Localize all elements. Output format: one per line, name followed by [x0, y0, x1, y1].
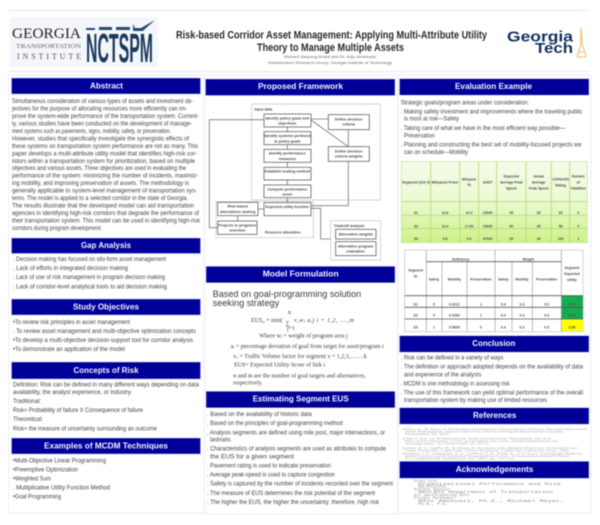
- text block: conclusion: . Risk can be defined in a variety of ways: [401, 355, 503, 362]
- heading: Model Formulation: Model Formulation: [263, 268, 339, 278]
- table: segment data: To: [467, 183, 471, 187]
- text block: concepts of risk: Risk= Probability of failure X Consequence of failure: [13, 407, 144, 414]
- text block: MCDM techniques: [13, 457, 110, 501]
- table: segment data: S3: [414, 237, 418, 241]
- table: segment data: 56: [559, 224, 563, 228]
- table: segment data: Number: [572, 174, 586, 178]
- heading: Gap Analysis: Gap Analysis: [81, 240, 131, 250]
- text block: abstract: ly, various studies have been conducted on the development of manage-: [12, 120, 192, 127]
- text block: abstract: corridors during program development.: [12, 225, 102, 232]
- text block: MCDM techniques: •Preemptive Optimization: [13, 466, 78, 473]
- text block: strategic goals: . Planning and constructing the best set of mobility-focused projects we: [401, 142, 582, 149]
- text block: estimating segment EUS: . Based on the principles of goal-programming method: [207, 420, 343, 427]
- text block: estimating segment EUS: . Characteristics of analysis segments are used as attributes to compute: [207, 446, 387, 453]
- heading: Estimating Segment EUS: [206, 391, 395, 408]
- text block: strategic goals: Strategic goals/program areas under consideration:: [401, 99, 529, 106]
- text block: gap analysis: [13, 256, 167, 290]
- flowchart: proposed framework: Input data: [254, 107, 273, 111]
- title: Theory to Manage Multiple Assets: [257, 42, 404, 54]
- text block: estimating segment EUS: . The measure of EUS determines the risk potential of the segment: [207, 490, 375, 497]
- text block: strategic goals: is most at risk—Safety: [404, 116, 460, 123]
- text block: goal-programming strategy: [213, 289, 361, 308]
- table: segment data: 0: [577, 211, 579, 215]
- table: segment data: 45: [509, 211, 513, 215]
- text block: estimating segment EUS: . Based on the availability of historic data: [207, 411, 312, 418]
- table: segment expected utility: 0.1000: [449, 314, 460, 318]
- text block: conclusion: . The use of this framework can yield optimal performance of the overall: [401, 389, 583, 396]
- text block: abstract: paper develops a multi-attribute utility model that identifies high-risk cor-: [12, 150, 197, 157]
- flowchart: proposed framework: Define decision: [335, 117, 363, 121]
- text block: acknowledgements: Project Personnel:: [414, 496, 456, 501]
- text block: conclusion: . MCDM is one methodology in assessing risk: [401, 380, 511, 387]
- text block: formula definitions: vₓ = Traffic Volume factor for segment x = 1,2,3,…….k: [233, 353, 367, 360]
- text block: estimating segment EUS: . Average peak-speed is used to capture congestion: [207, 472, 335, 479]
- text block: study objectives: •To demonstrate an application of the model: [13, 346, 125, 353]
- table: segment data: 55: [509, 237, 513, 241]
- text block: acknowledgements: Project Title:: [414, 479, 438, 484]
- text block: acknowledgements: Georgia Department of Transportation: [418, 490, 553, 495]
- text block: abstract: their transportation system. This model can be used in identifying high-risk: [12, 218, 201, 224]
- text block: abstract: ing mobility, and improving preservation of assets. The methodology is: [12, 180, 189, 187]
- table: segment data: COPACES: [552, 177, 570, 181]
- table: segment expected utility: Mobility: [448, 277, 461, 281]
- text block: gap analysis: . Decision making has focused on silo-form asset management: [13, 256, 166, 263]
- table: segment data: 15000: [483, 211, 493, 215]
- table: segment expected utility: Safety: [498, 277, 509, 281]
- table: segment data: 1: [577, 237, 579, 241]
- text block: estimating segment EUS: [207, 411, 393, 506]
- table: segment expected utility: 0: [433, 314, 435, 318]
- text block: concepts of risk: Theoretical:: [13, 416, 43, 423]
- table: segment expected utility: Deficiency: [452, 258, 469, 262]
- text block: concepts of risk: Traditional:: [13, 398, 41, 405]
- flowchart: proposed framework: measures: [279, 157, 296, 161]
- text block: estimating segment EUS: . Analysis segments are defined using mile post, major intersections, or: [207, 429, 385, 436]
- text block: study objectives: [13, 319, 196, 353]
- text block: MCDM techniques: •Multi-Objective Linear Programming: [13, 457, 106, 464]
- text block: goal-programming strategy: seeking strategy: [213, 298, 280, 308]
- formula: EUS: = min(: [265, 317, 282, 324]
- heading: Concepts of Risk: Concepts of Risk: [74, 365, 139, 375]
- formula: EUS: EUS: [251, 318, 262, 324]
- table: segment data: Segment (GA 3): [402, 181, 430, 185]
- text block: references: strategy.aspx. Accessed Jan. 10, 2012.: [405, 442, 490, 446]
- formula: EUS: ai: [262, 320, 265, 324]
- table: segment data: Peak Speed: [529, 186, 548, 190]
- text block: estimating segment EUS: the EUS for a given segment: [210, 453, 294, 460]
- table: segment data: 15000: [483, 224, 493, 228]
- text block: references: Asset Management. Detroit University, Detroit Intelligent Infrastructure Systems,: [405, 430, 565, 434]
- flowchart: proposed framework: evaluation: [346, 250, 366, 254]
- text block: abstract: tems. The model is applied to a selected corridor in the state of Georgia.: [12, 195, 188, 202]
- text block: estimating segment EUS: . The higher the EUS, the higher the uncertainty; therefore, high risk: [207, 499, 380, 506]
- heading: Acknowledgements: Acknowledgements: [456, 464, 534, 474]
- table: segment data: Milepost: [462, 177, 477, 181]
- table: segment expected utility: 0: [433, 302, 435, 306]
- flowchart: proposed framework: Resource allocation: [265, 231, 301, 235]
- logo: Georgia Tech: Tech: [535, 41, 573, 57]
- text block: strategic goals: . Making safety investment and improvements where the traveling public: [401, 108, 582, 115]
- table: segment data: Actual: [533, 174, 544, 178]
- text block: references: Philadelphia, PA, 2007.: [405, 432, 450, 437]
- table: segment data: of: [577, 180, 581, 184]
- table: segment data: Fatalities: [571, 186, 586, 190]
- text block: abstract: prove the system-wide performance of the transportation system. Current-: [12, 113, 199, 120]
- title: Infrastructure Research Group, Georgia Institute of Technology: [268, 61, 392, 65]
- table: segment expected utility: 0.37: [569, 302, 575, 306]
- table: segment expected utility: Utility: [567, 278, 577, 282]
- table: segment expected utility: 0.3: [520, 325, 524, 329]
- table: segment data: Expected: [504, 174, 519, 178]
- heading: Study Objectives: Study Objectives: [73, 302, 139, 312]
- title: Risk-based Corridor Asset Management: Applying Multi-Attribute Utility: [176, 30, 487, 42]
- heading: Proposed Framework: [206, 79, 395, 96]
- flowchart: proposed framework: Expected utility function: [266, 205, 310, 209]
- flowchart: proposed framework: Compute performance: [267, 187, 307, 191]
- text block: formula definitions: [231, 333, 384, 386]
- text block: study objectives: •To develop a multi-objective decision-support tool for corridor analysis: [13, 337, 193, 344]
- heading: Conclusion: Conclusion: [472, 338, 515, 348]
- flowchart: proposed framework: alternatives ranking: [220, 210, 256, 214]
- flowchart: proposed framework: Alternative program: [338, 244, 374, 248]
- text block: strategic goals: can on schedule—Mobility: [404, 149, 469, 156]
- text block: estimating segment EUS: landmarks: [210, 437, 231, 444]
- text block: formula definitions: EUS= Expected Utility Score of link i: [234, 362, 325, 368]
- text block: references: Keeney, R. L., Raiffa, H., & Meyer, R. Decisions with Multiple Objectives: Preferences and: [402, 446, 578, 451]
- table: segment data: 35: [537, 224, 541, 228]
- text block: references: Value Trade-offs. Cambridge, United Kingdom: Cambridge University Press, 1993.: [405, 448, 570, 454]
- text block: abstract: jectives for the purpose of allocating resources more efficiently can im-: [11, 106, 187, 112]
- text block: formula definitions: n and m are the number of goal targets and alternatives,: [233, 372, 366, 379]
- table: segment expected utility: Mobility: [515, 277, 529, 281]
- text block: gap analysis: . Lack of corridor-level analytical tools to aid decision making: [13, 283, 167, 290]
- table: segment expected utility: 1: [433, 325, 435, 329]
- text block: acknowledgements: Project Sponsor:: [414, 487, 452, 492]
- flowchart: proposed framework: Identify policy goals and: [265, 116, 310, 120]
- panel: right column: [398, 75, 591, 513]
- flowchart: proposed framework: criteria: [342, 123, 356, 127]
- heading: References: References: [473, 410, 517, 420]
- table: segment expected utility: 0.3: [520, 302, 524, 306]
- text block: strategic goals: Preservation: [404, 132, 435, 140]
- heading: Conclusion: [400, 336, 589, 352]
- formula: EUS: j=1: [286, 326, 295, 332]
- table: segment data: Rating: [555, 183, 566, 187]
- text block: formula definitions: Where wⱼ = weight of program area j: [259, 333, 348, 340]
- header: logo Georgia Transportation Institute and NCTSPM: INSTITUTE: [17, 52, 81, 61]
- table: segment expected utility: S2: [414, 314, 418, 318]
- header: logo Georgia Transportation Institute and NCTSPM: GEORGIA: [12, 26, 81, 42]
- text block: references: for Competitively. Washington, DC, 2007, pp. 133-142.: [405, 456, 515, 462]
- table: segment data: S2: [414, 224, 418, 228]
- table: segment data: 14.4: [466, 211, 472, 215]
- table: segment expected utility: 0.3: [520, 314, 524, 318]
- table: segment data: 0.8: [443, 237, 447, 241]
- flowchart: proposed framework: [209, 104, 381, 260]
- heading: Evaluation Example: [400, 79, 589, 95]
- heading: Examples of MCDM Techniques: [12, 438, 200, 454]
- table: segment expected utility: 0.4: [501, 314, 506, 318]
- text block: acknowledgements: Adjo Amekudzi, Ph.D., Michael Meyer,: [418, 499, 564, 504]
- heading: Proposed Framework: Proposed Framework: [258, 81, 343, 91]
- table: segment data: AADT: [483, 181, 493, 185]
- text block: abstract: ridors within a transportation system for prioritization, based on multiple: [12, 158, 196, 165]
- table: segment expected utility: 1: [480, 302, 482, 306]
- text block: references: Multi-Criteria Capital Investment Programming Process. Transportation Research Board.: [405, 454, 570, 458]
- table: segment data: 47000: [483, 237, 493, 241]
- table: segment data: Milepost From: [432, 181, 458, 185]
- panel: middle column: [204, 75, 398, 514]
- table: segment expected utility: Segment: [565, 266, 580, 270]
- table: segment data: 14.4: [442, 224, 448, 228]
- heading: Concepts of Risk: [12, 362, 200, 379]
- text block: concepts of risk: availability, the analyst experience, or industry.: [13, 389, 132, 396]
- title: [176, 30, 487, 65]
- heading: Model Formulation: [206, 266, 395, 283]
- text block: abstract: [11, 98, 201, 232]
- table: segment data: 63: [559, 211, 563, 215]
- text block: acknowledgements: Decisions: [418, 485, 446, 490]
- table: segment expected utility: 0.4: [501, 325, 506, 329]
- table: segment expected utility: S3: [414, 325, 418, 329]
- table: segment expected utility: 0.2212: [449, 302, 460, 306]
- text block: references: The City of Edmonton Infrastructure Strategy (n.d.).: [402, 436, 552, 440]
- table: segment expected utility: 0: [480, 325, 482, 329]
- text block: goal-programming strategy: Based on goal-programming solution: [213, 289, 361, 299]
- formula: EUS: vₓwⱼ aᵢ) i = 1,2, ….,m: [294, 317, 355, 324]
- table: segment expected utility: 0.3: [544, 302, 549, 306]
- flowchart: proposed framework: objectives: [278, 122, 296, 126]
- text block: acknowledgements: Organizational Performance and Risk: [418, 482, 561, 487]
- text block: abstract: generally applicable to system-level management of transportation sys-: [12, 188, 197, 195]
- text block: concepts of risk: Risk= the measure of uncertainty surrounding an outcome: [13, 426, 158, 432]
- table: segment data: Average Peak: [500, 180, 523, 184]
- text: NCTSPM: [86, 25, 153, 71]
- text block: MCDM techniques: •Weighted Sum: [13, 475, 51, 482]
- text block: conclusion: and experience of the analysts: [404, 371, 481, 378]
- text block: abstract: The results illustrate that the developed model can aid transportation: [12, 203, 194, 210]
- text block: abstract: However, studies that specifically investigate the synergistic effects of: [12, 135, 189, 142]
- flowchart: proposed framework: to policy goals: [274, 139, 300, 143]
- heading: Estimating Segment EUS: Estimating Segment EUS: [253, 394, 349, 404]
- heading: References: [400, 408, 589, 424]
- table: segment expected utility: 0.58: [569, 325, 575, 329]
- text block: acknowledgements: [414, 479, 564, 507]
- logo: Georgia Tech: Georgia: [507, 30, 574, 46]
- table: segment expected utility: 0.38: [569, 314, 575, 318]
- text block: acknowledgements: All participating DOTs: [414, 493, 469, 498]
- text block: references: Sorensen, J. E., Amekudzi, A. A., Lambert, J. H., Kaini, K., et al. (n.d.). Strategizing Highway: [402, 452, 583, 456]
- flowchart: proposed framework: Projects or programs: [218, 223, 256, 227]
- table: segment expected utility: S1: [414, 302, 418, 306]
- flowchart: proposed framework: Identify systems pertinent: [264, 134, 311, 138]
- table: segment expected utility: Expected: [564, 272, 580, 276]
- text block: estimating segment EUS: . Safety is captured by the number of incidents recorded over the segment: [207, 481, 393, 488]
- table: segment expected utility: 0.5636: [449, 325, 460, 329]
- table: segment data: Average: [532, 180, 546, 184]
- formula: EUS: n: [288, 310, 291, 316]
- heading: Examples of MCDM Techniques: Examples of MCDM Techniques: [44, 440, 168, 450]
- table: segment data: Speed: [506, 186, 517, 190]
- table: segment data: 13.6: [442, 211, 448, 215]
- table: segment data: 35: [537, 211, 541, 215]
- table: segment expected utility: Preservation: [470, 277, 492, 281]
- table: segment data: 0: [577, 224, 579, 228]
- table: segment data: 50: [509, 224, 513, 228]
- text block: study objectives: . To review asset management and multi-objective optimization concepts: [13, 328, 196, 335]
- header: logo Georgia Transportation Institute and NCTSPM: TRANSPORTATION: [16, 44, 82, 50]
- text block: study objectives: •To review risk principles in asset management: [13, 319, 130, 326]
- table: segment expected utility: 1: [480, 314, 482, 318]
- flowchart: proposed framework: selection: [229, 229, 246, 233]
- flowchart: proposed framework: score: [282, 193, 292, 197]
- table: segment expected utility: Weight: [523, 258, 535, 262]
- header: logo Georgia Transportation Institute and NCTSPM: [10, 17, 158, 71]
- table: segment data: [401, 162, 587, 243]
- text block: conclusion: . The definition or approach adopted depends on the availability of data: [401, 364, 584, 371]
- heading: Study Objectives: [12, 299, 200, 315]
- heading: Abstract: Abstract: [90, 80, 123, 90]
- flowchart: proposed framework: Define decision: [335, 149, 363, 153]
- flowchart: proposed framework: Establish scaling method: [265, 169, 311, 173]
- text block: conclusion: [401, 355, 584, 404]
- table: segment expected utility: 0.3: [544, 314, 549, 318]
- logo: Georgia Tech: [507, 28, 586, 57]
- text block: concepts of risk: [13, 381, 200, 432]
- table: segment expected utility: Preservation: [536, 277, 557, 281]
- table: segment data: S1: [414, 211, 418, 215]
- heading: Abstract: [12, 78, 200, 94]
- text block: concepts of risk: Definition: Risk can be defined in many different ways depending on data: [13, 381, 200, 388]
- heading: Evaluation Example: Evaluation Example: [455, 81, 532, 91]
- flowchart: proposed framework: criteria weights: [335, 155, 362, 159]
- text block: references: Akbar, A., & Shira, F. Mitigating Infrastructure Performance Failures Through Risk-based: [402, 427, 588, 432]
- text block: MCDM techniques: . Multiplicative Utility Function Method: [13, 484, 110, 491]
- title: Richard Sarpong Boadi and Dr. Adjo Amekudzi: [284, 55, 376, 59]
- flowchart: proposed framework: Tradeoff analysis: [334, 224, 365, 228]
- flowchart: proposed framework: Identify performance: [269, 152, 306, 156]
- text block: references: http://www.edmonton.ca/city_government/city_wide_initiatives/infrastructure-: [405, 439, 560, 443]
- text block: abstract: objectives and various assets. Three objectives are used in evaluating the: [12, 165, 187, 172]
- table: segment data: 100: [558, 237, 564, 241]
- text block: MCDM techniques: •Goal Programming: [13, 494, 61, 501]
- text block: abstract: ment systems such as pavements, signs, mobility, safety, or preservation.: [12, 128, 171, 135]
- text block: strategic goals: . Taking care of what we have in the most efficient way possible—: [401, 125, 566, 132]
- heading: Acknowledgements: [400, 461, 589, 478]
- table: segment expected utility: Safety: [429, 277, 439, 281]
- table: segment expected utility: 0.4: [501, 302, 506, 306]
- text block: abstract: Simultaneous consideration of various types of assets and investment ob-: [12, 98, 193, 105]
- table: segment data: 5.9: [467, 237, 471, 241]
- text block: references: [402, 427, 588, 462]
- table: segment expected utility: [405, 250, 583, 332]
- table: segment data: 17.83: [465, 224, 473, 228]
- formula: EUS: ∑: [286, 321, 290, 327]
- formula: EUS: [250, 310, 355, 332]
- table: segment expected utility: Segment: [408, 269, 424, 273]
- text block: conclusion: transportation system by making use of limited resources: [404, 397, 547, 404]
- table: segment expected utility: ID: [414, 275, 418, 279]
- flowchart: proposed framework: Risk-based: [228, 205, 248, 209]
- text block: strategic goals: [401, 99, 582, 156]
- text block: formula definitions: aᵢ = percentage deviation of goal from target for asset/program i: [231, 343, 384, 350]
- text block: acknowledgements: Ph.D., P.E.: [418, 502, 448, 507]
- table: segment data: 35: [537, 237, 541, 241]
- text block: abstract: performance of the system: minimizing the number of incidents, maximiz-: [12, 173, 198, 180]
- heading: Gap Analysis: [12, 238, 200, 254]
- text block: abstract: agencies in identifying high-risk corridors that degrade the performance of: [12, 210, 199, 217]
- flowchart: proposed framework: Alternative weights: [338, 232, 373, 236]
- panel: left column: [8, 75, 204, 513]
- table: segment expected utility: 0.3: [544, 325, 549, 329]
- text block: formula definitions: respectively.: [233, 380, 263, 386]
- text block: estimating segment EUS: . Pavement rating is used to indicate preservation: [207, 462, 331, 469]
- text block: gap analysis: . Lack of efforts in integrated decision making: [13, 265, 128, 272]
- text block: abstract: these systems on transportation system performance are not as many. This: [12, 143, 198, 150]
- text block: gap analysis: . Lack of use of risk management in program decision making: [13, 274, 165, 281]
